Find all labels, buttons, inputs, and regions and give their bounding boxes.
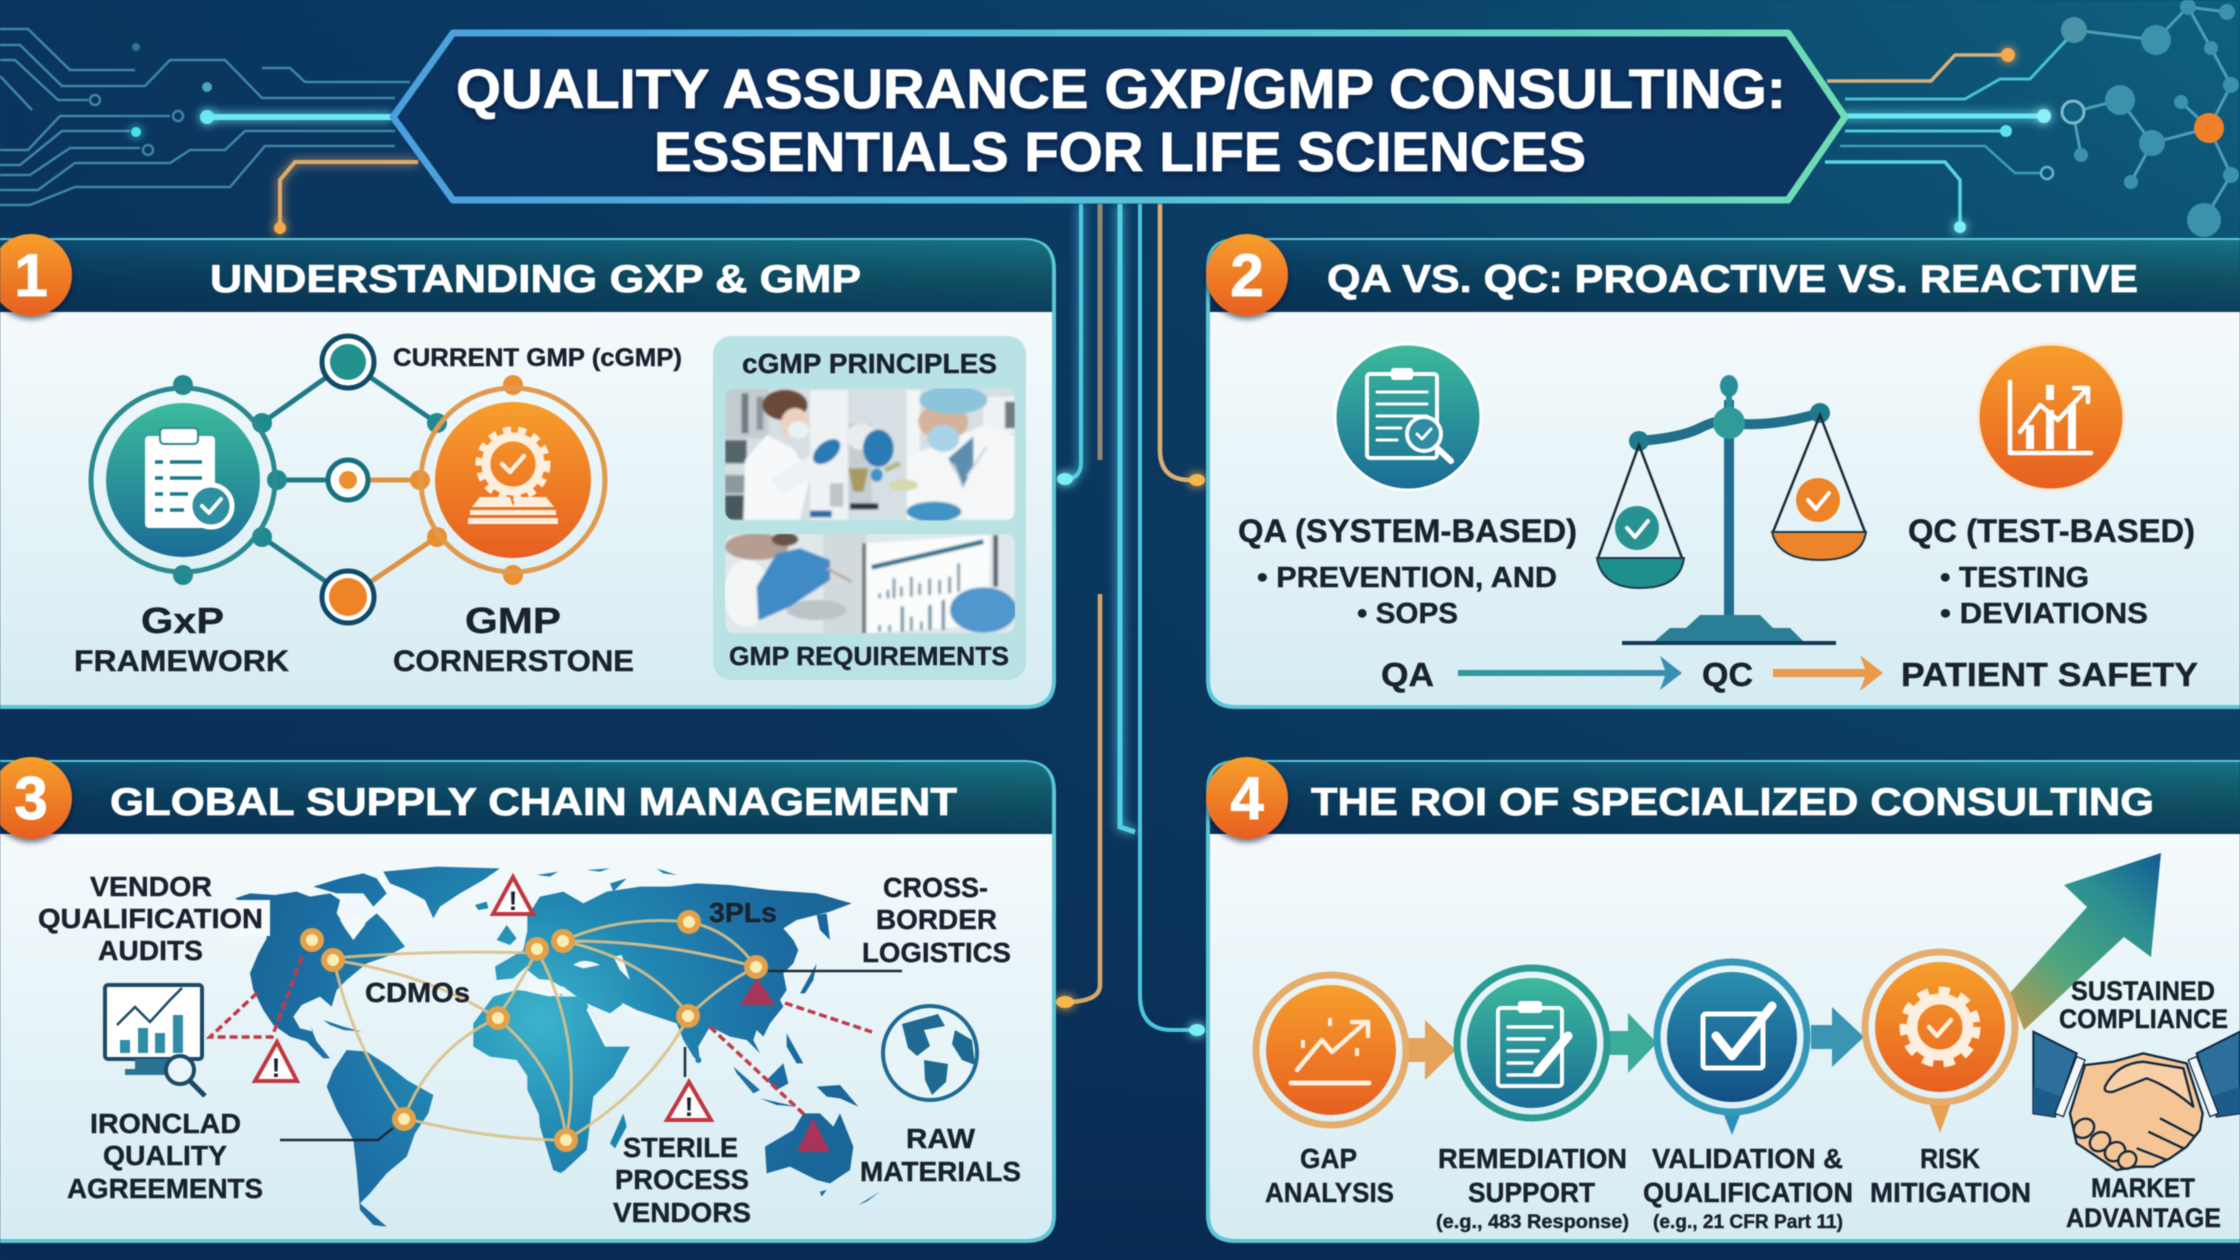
title banner: QUALITY ASSURANCE GXP/GMP CONSULTING: <box>456 57 1786 120</box>
label: cross-border logistics <box>862 872 1011 968</box>
label: raw materials: MATERIALS <box>860 1156 1021 1187</box>
panel 2: QA vs QC <box>1206 234 2240 707</box>
label: vendor qualification audits: QUALIFICATION <box>38 903 263 934</box>
supply routes <box>334 921 756 1140</box>
label: sterile process vendors: VENDORS <box>613 1197 751 1228</box>
labels: steps: SUPPORT <box>1468 1177 1595 1208</box>
circuit traces right of title <box>1825 34 2072 233</box>
central vertical circuit lines <box>1056 204 1205 1036</box>
warning triangle north <box>493 877 533 916</box>
QC text block: • DEVIATIONS <box>1940 598 2148 630</box>
title banner: ESSENTIALS FOR LIFE SCIENCES <box>654 120 1586 183</box>
panel 4: ROI of consulting <box>1206 757 2240 1241</box>
icon: QC chart <box>1978 344 2124 490</box>
label: GxP framework <box>74 600 289 678</box>
flow: QA to QC to patient safety <box>1381 655 2198 693</box>
label: ironclad quality agreements: QUALITY <box>103 1140 227 1171</box>
label: ironclad quality agreements: IRONCLAD <box>90 1108 241 1139</box>
node: current GMP <box>322 336 374 388</box>
QC text block: QC (TEST-BASED) <box>1908 513 2195 549</box>
panel 1: understanding GxP and GMP <box>0 234 1054 707</box>
label: ironclad quality agreements: AGREEMENTS <box>67 1173 263 1204</box>
labels: steps: (e.g., 21 CFR Part 11) <box>1653 1212 1843 1233</box>
label: GxP framework: FRAMEWORK <box>74 645 289 678</box>
labels: steps: RISK <box>1920 1143 1980 1174</box>
label: GxP framework: GxP <box>141 600 224 641</box>
flow: QA to QC to patient safety: QA <box>1381 656 1434 693</box>
label: cross-border logistics: CROSS- <box>883 872 988 903</box>
badge 4 <box>1206 757 1288 839</box>
step: remediation icon <box>1457 968 1607 1118</box>
labels: steps: ANALYSIS <box>1265 1177 1394 1208</box>
label: raw materials: RAW <box>906 1123 976 1154</box>
growth arrow <box>2010 853 2161 1030</box>
leader lines <box>280 971 902 1140</box>
label: vendor qualification audits: AUDITS <box>98 935 203 966</box>
flow: QA to QC to patient safety: QC <box>1702 656 1753 693</box>
labels: steps: QUALIFICATION <box>1643 1177 1853 1208</box>
label: cross-border logistics: LOGISTICS <box>862 937 1011 968</box>
label: GMP cornerstone: GMP <box>465 600 561 641</box>
node: middle <box>328 460 368 500</box>
step: risk icon <box>1865 952 2015 1133</box>
labels: steps <box>1265 1143 2031 1233</box>
heading: global supply chain: GLOBAL SUPPLY CHAIN MANAGEMENT <box>110 781 957 824</box>
heading: QA vs QC: QA VS. QC: PROACTIVE VS. REACTIVE <box>1327 258 2138 301</box>
node: bottom <box>322 571 374 623</box>
flow: QA to QC to patient safety: PATIENT SAFETY <box>1901 656 2198 693</box>
label: cross-border logistics: BORDER <box>876 904 997 935</box>
label: market advantage: MARKET <box>2091 1173 2195 1203</box>
balance scale <box>1597 375 1866 645</box>
cGMP principles box <box>713 336 1026 680</box>
warning triangle west: ! <box>272 1053 280 1083</box>
GxP circle icon <box>91 388 275 572</box>
label: CDMOs: CDMOs <box>365 977 470 1008</box>
panel 3: global supply chain <box>0 757 1054 1241</box>
badge 2 <box>1206 234 1288 316</box>
heading: understanding: UNDERSTANDING GXP & GMP <box>210 258 861 301</box>
labels: steps: GAP <box>1300 1143 1357 1174</box>
badge 4: 4 <box>1230 765 1264 832</box>
labels: steps: VALIDATION & <box>1652 1143 1843 1174</box>
label: ironclad quality agreements <box>67 1108 263 1204</box>
label: vendor qualification audits: VENDOR <box>90 871 212 902</box>
route nodes <box>303 913 765 1149</box>
label: sterile process vendors: STERILE <box>623 1132 738 1163</box>
QA text block: QA (SYSTEM-BASED) <box>1238 513 1577 549</box>
label: sustained compliance: SUSTAINED <box>2071 976 2215 1006</box>
label: GMP cornerstone <box>393 600 634 678</box>
step arrows <box>1405 1007 1864 1080</box>
QA text block <box>1238 513 1577 630</box>
QC text block <box>1908 513 2195 630</box>
label: vendor qualification audits <box>38 871 270 966</box>
warning triangle west <box>255 1042 297 1083</box>
warning triangle south <box>667 1082 711 1122</box>
world map: eurasia, africa and oceania <box>527 868 880 1205</box>
warning triangle south: ! <box>684 1092 694 1122</box>
QA text block: • SOPS <box>1357 598 1458 630</box>
photo: lab scientists <box>725 386 1015 522</box>
label: GMP cornerstone: CORNERSTONE <box>393 645 634 678</box>
label: raw materials <box>860 1123 1021 1187</box>
label: 3PLs: 3PLs <box>709 897 777 928</box>
heading: ROI: THE ROI OF SPECIALIZED CONSULTING <box>1311 781 2154 824</box>
molecule network <box>2061 0 2239 237</box>
label: sterile process vendors: PROCESS <box>615 1164 749 1195</box>
QA text block: • PREVENTION, AND <box>1257 562 1557 594</box>
badge 3: 3 <box>14 765 48 832</box>
warning triangle north: ! <box>508 886 518 916</box>
icon: handshake <box>2033 1032 2240 1172</box>
icon: monitor audit <box>105 985 205 1096</box>
label: sustained compliance: COMPLIANCE <box>2059 1004 2228 1034</box>
label: current GMP: CURRENT GMP (cGMP) <box>393 344 682 372</box>
label: sustained compliance <box>2059 976 2228 1034</box>
photo: data review <box>723 533 1017 633</box>
red risk routes <box>210 957 872 1117</box>
badge 1: 1 <box>14 242 48 309</box>
icon: globe <box>883 1006 977 1100</box>
badge 1 <box>0 234 72 316</box>
badge 2: 2 <box>1230 242 1264 309</box>
labels: steps: MITIGATION <box>1870 1177 2031 1208</box>
labels: steps: REMEDIATION <box>1438 1143 1627 1174</box>
labels: steps: (e.g., 483 Response) <box>1436 1212 1629 1233</box>
title banner <box>393 33 1845 200</box>
icon: QA clipboard <box>1335 344 1481 490</box>
circuit traces left of title <box>0 29 410 205</box>
step: validation icon <box>1657 962 1807 1135</box>
label: market advantage: ADVANTAGE <box>2066 1203 2221 1233</box>
hazard markers <box>740 978 830 1152</box>
connector network <box>173 362 523 597</box>
world map: americas <box>235 867 562 1227</box>
step: gap analysis icon <box>1256 975 1406 1125</box>
GMP circle icon <box>421 388 605 572</box>
label: sterile process vendors <box>613 1132 751 1228</box>
badge 3 <box>0 757 72 839</box>
label: market advantage <box>2066 1173 2221 1233</box>
label: cGMP principles: cGMP PRINCIPLES <box>742 348 997 379</box>
orange trace left of title <box>274 162 418 234</box>
QC text block: • TESTING <box>1940 562 2089 594</box>
label: GMP requirements: GMP REQUIREMENTS <box>729 641 1009 671</box>
